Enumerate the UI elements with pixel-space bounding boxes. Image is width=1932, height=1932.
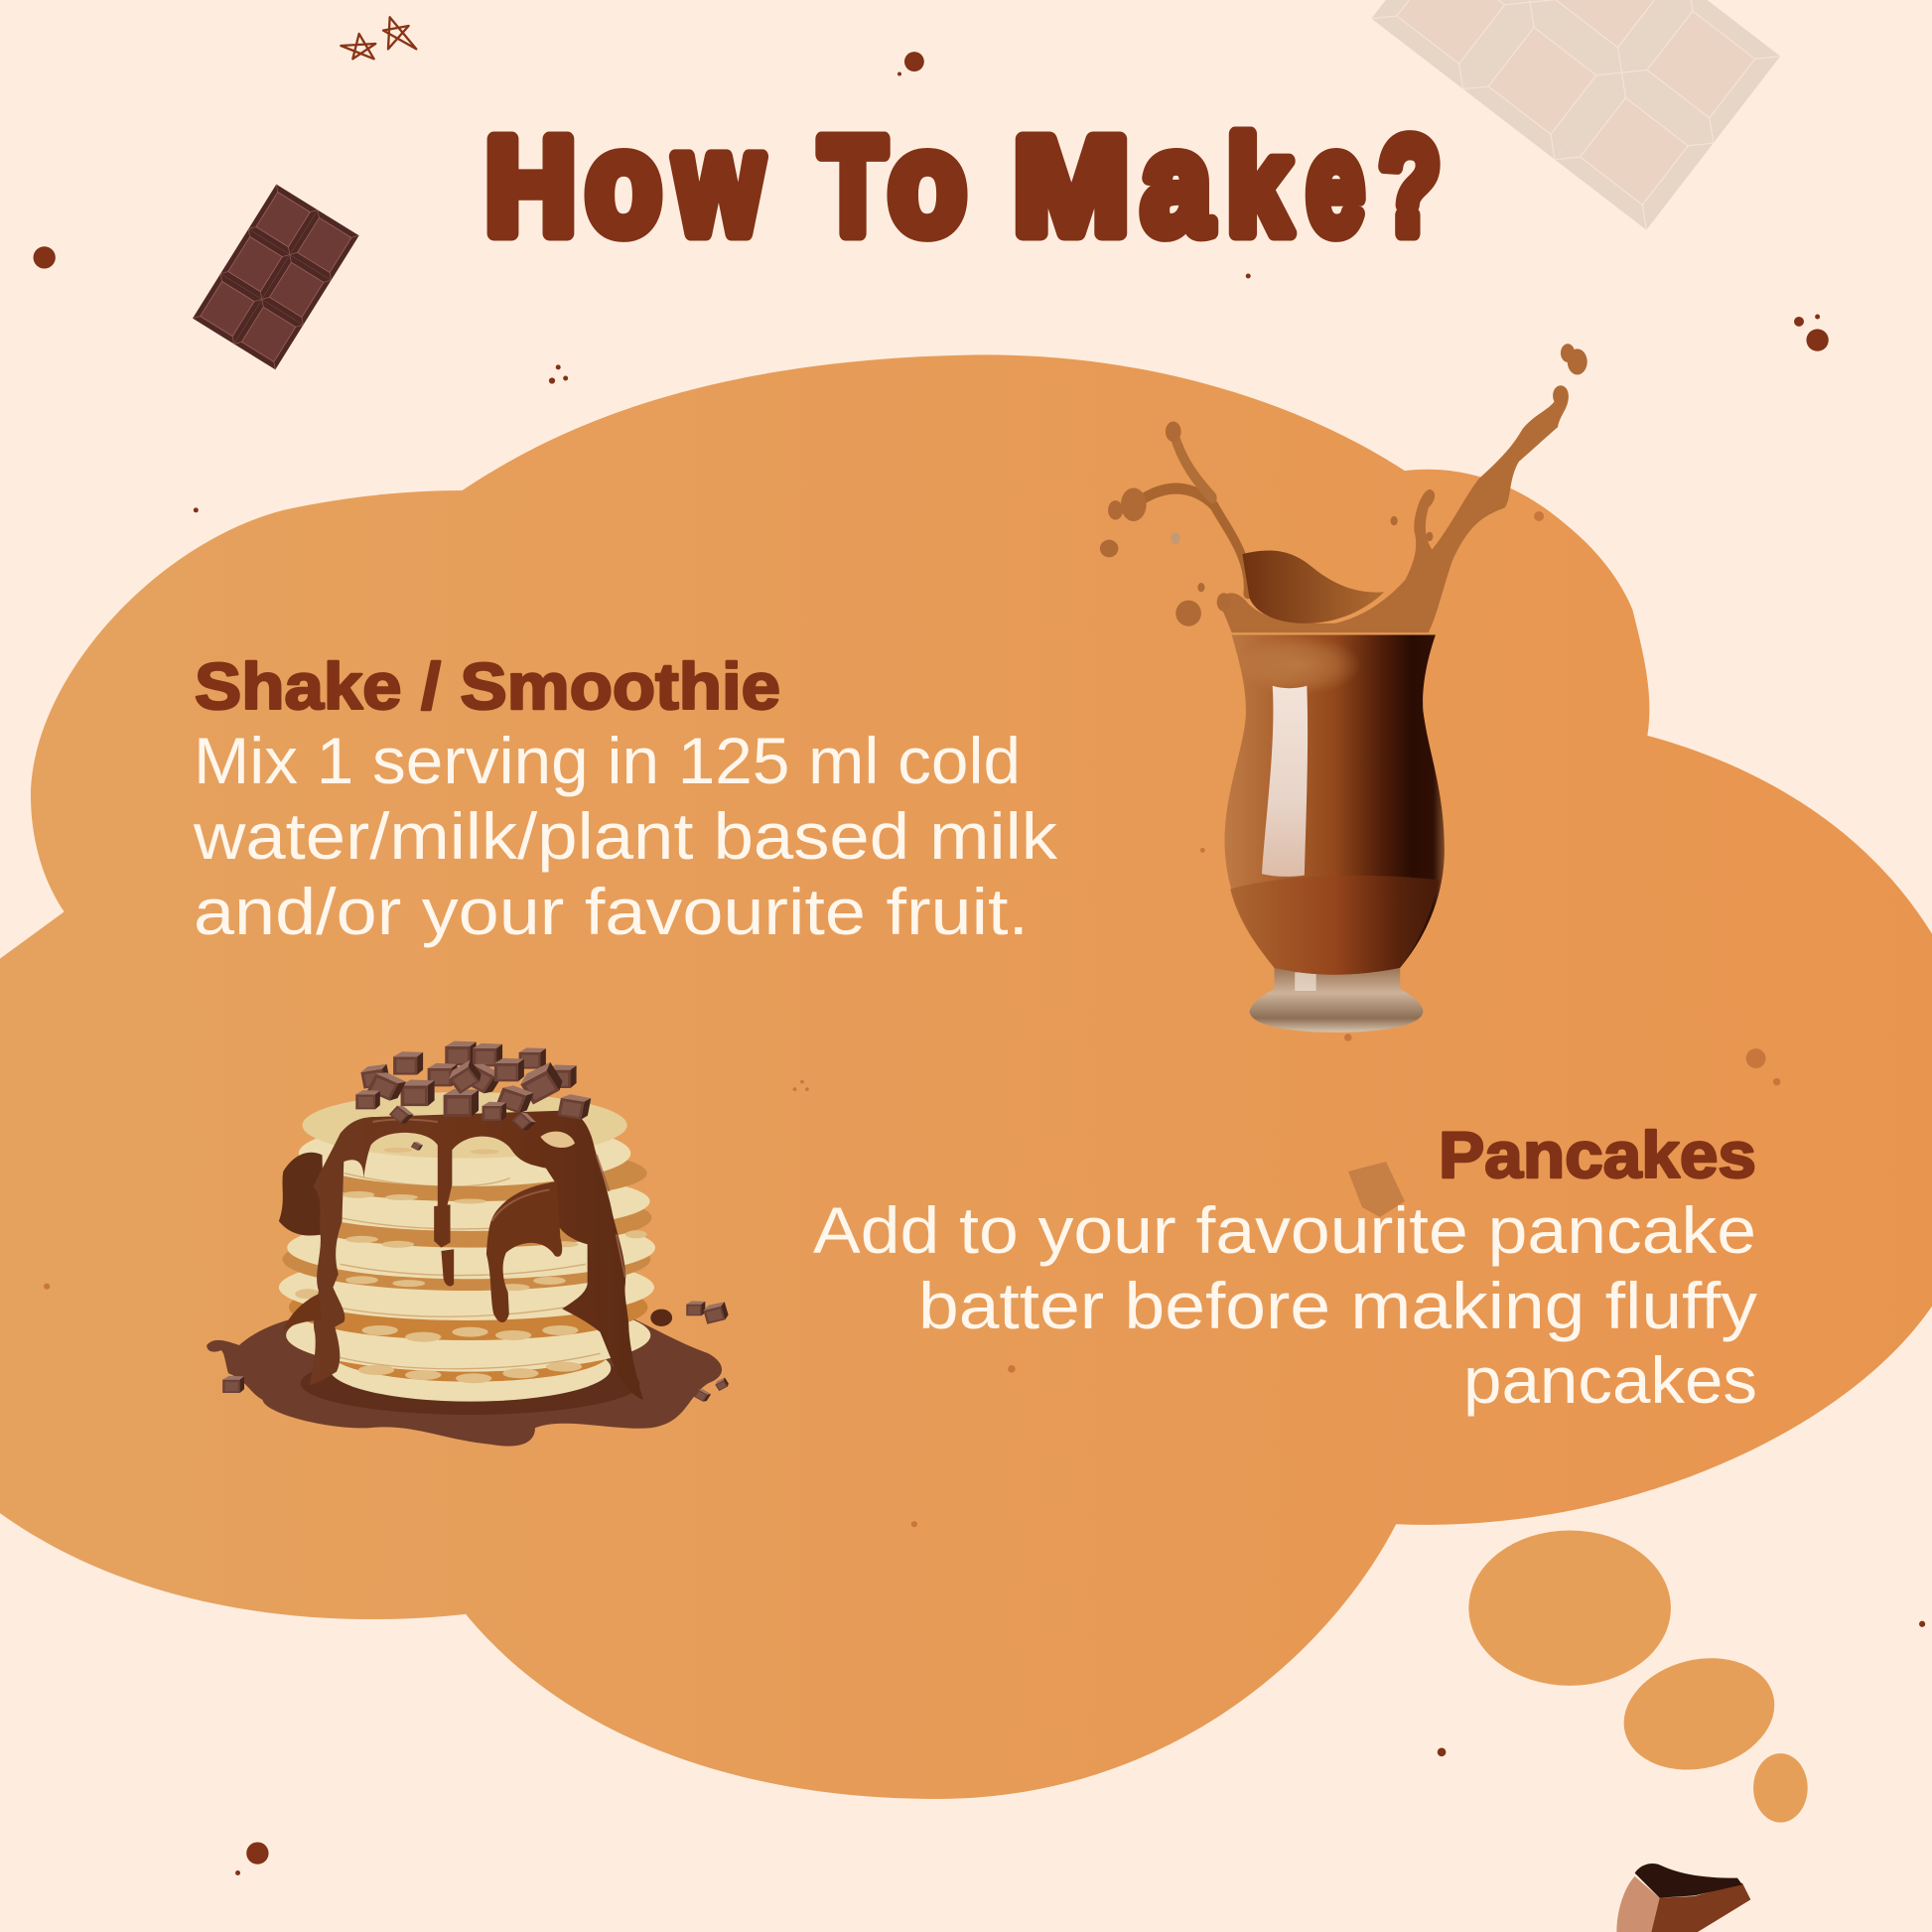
- title: ?: [1379, 110, 1441, 263]
- pancake lace: [295, 1148, 647, 1383]
- icon: stars: [341, 17, 416, 59]
- milk lower band: [1230, 876, 1439, 975]
- chocolate chunks: [355, 1041, 591, 1152]
- highlight: [1262, 686, 1308, 877]
- title: e: [1307, 102, 1364, 264]
- body: shake instructions: and/or your favourite fruit.: [194, 875, 1029, 948]
- text block: Pancakes: [813, 1118, 1757, 1417]
- title: H: [485, 110, 576, 263]
- far-left chocolate drip: [279, 1153, 324, 1236]
- glass body: [1225, 635, 1445, 975]
- chocolate bar: [193, 185, 359, 369]
- faded chocolate piece in blob: [1348, 1162, 1405, 1217]
- chocolate puddle: [207, 1313, 722, 1447]
- body: shake instructions: Mix 1 serving in 125 ml cold: [194, 724, 1021, 797]
- heading: Pancakes: Pancakes: [1439, 1118, 1756, 1191]
- heading: Shake / Smoothie: Shake / Smoothie: [195, 649, 780, 723]
- text block: Shake / Smoothie: [193, 649, 1058, 948]
- title: a: [1142, 102, 1213, 264]
- splash: [1100, 344, 1587, 632]
- body: shake instructions: water/milk/plant based milk: [193, 799, 1058, 873]
- body: pancake instructions: [813, 1193, 1757, 1417]
- loose chunks: [222, 1301, 730, 1403]
- body: pancake instructions: batter before making fluffy: [918, 1269, 1757, 1342]
- thought bubbles: [1468, 1530, 1808, 1823]
- decorative faded chocolate bar: [1371, 0, 1780, 230]
- chocolate chunk at bottom edge: [1616, 1863, 1750, 1932]
- body: pancake instructions: pancakes: [1463, 1343, 1757, 1417]
- illustration: chocolate shake glass: [1100, 344, 1587, 1033]
- cloud blob panel: [0, 354, 1932, 1799]
- chocolate sheet and columns: [310, 1110, 643, 1400]
- title: o: [889, 102, 966, 264]
- title: o: [586, 102, 661, 264]
- pancake layers: [279, 1092, 655, 1402]
- title: k: [1227, 110, 1291, 263]
- title: w: [674, 102, 762, 264]
- chocolate drop: [650, 1310, 672, 1326]
- glass foot: [1249, 961, 1423, 1033]
- pancake shadows under layers: [337, 1173, 600, 1369]
- title: M: [1014, 110, 1129, 263]
- title: T: [820, 110, 886, 263]
- chocolate drips: [283, 1132, 575, 1330]
- body: pancake instructions: Add to your favourite pancake: [813, 1193, 1756, 1267]
- body: shake instructions: [193, 724, 1058, 948]
- chocolate highlights: [372, 1119, 625, 1278]
- illustration: pancake stack: [207, 1041, 730, 1447]
- top foam band: [1237, 635, 1361, 695]
